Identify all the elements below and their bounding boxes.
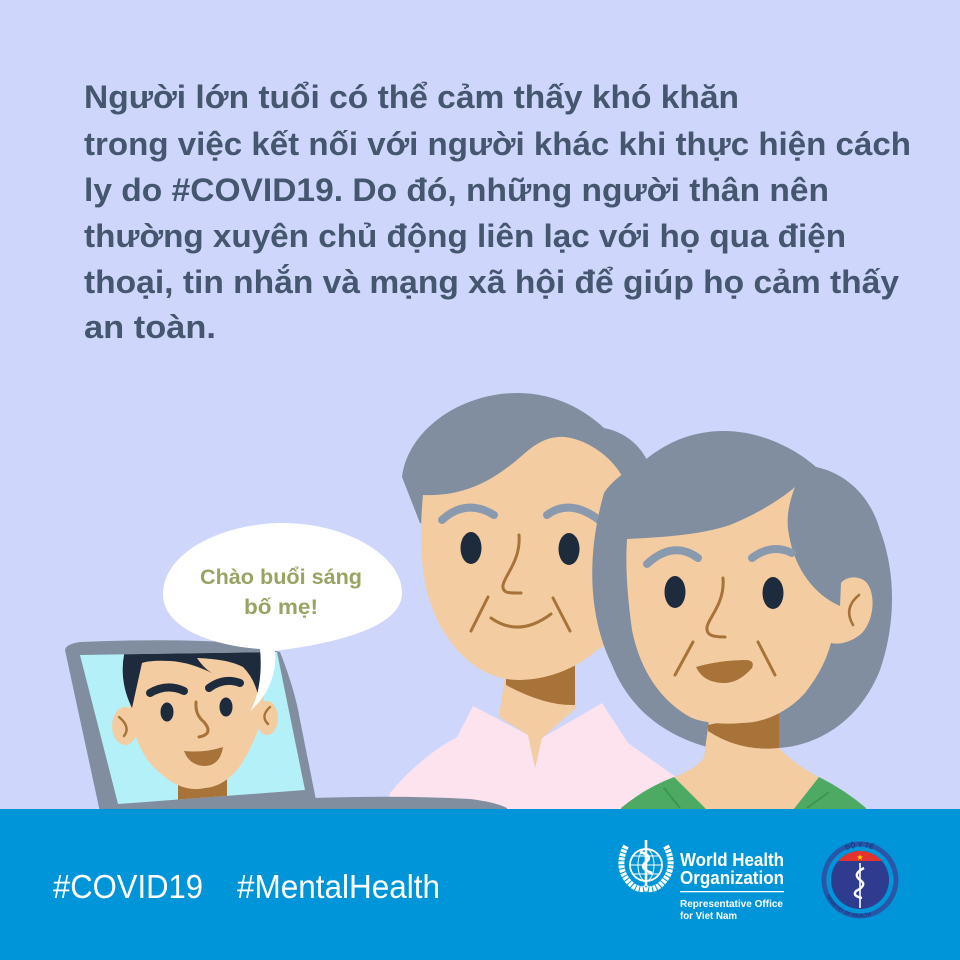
WHO office text [680, 899, 783, 922]
WHO wordmark [680, 850, 784, 888]
laptop base [121, 796, 507, 809]
woman face [626, 487, 873, 724]
star: ★ [856, 853, 864, 862]
heading paragraph: an toàn. [84, 309, 216, 345]
red band [830, 851, 890, 861]
laptop [65, 640, 507, 815]
laptop frame [65, 640, 316, 812]
logo: World Health Organization [621, 840, 784, 922]
man neck [499, 660, 576, 768]
heading paragraph [84, 79, 911, 345]
woman eyes [664, 576, 784, 609]
boy ears [112, 701, 278, 745]
boy nose [196, 702, 208, 737]
boy eyes [160, 698, 232, 722]
woman ear detail [849, 595, 859, 625]
woman shirt [621, 777, 866, 809]
bubble text: bố mẹ! [244, 596, 318, 619]
logo: Ministry of Health: MINISTRY OF HEALTH [826, 894, 871, 917]
man nose and smile lines [471, 535, 570, 631]
man hair [402, 393, 646, 524]
hashtags: #COVID19 [53, 868, 203, 905]
man eyebrows [442, 508, 599, 520]
WHO office text: for Viet Nam [680, 911, 737, 922]
woman mouth [696, 660, 753, 683]
bubble text [200, 566, 362, 619]
ministry name: BỘ Y TẾ [844, 842, 874, 850]
bubble text: Chào buổi sáng [200, 566, 362, 589]
woman neck shadow [708, 710, 779, 749]
boy on screen [112, 652, 278, 800]
boy eyebrows [150, 681, 240, 693]
WHO office text: Representative Office [680, 899, 783, 910]
woman shirt seams [664, 788, 829, 808]
WHO wordmark: Organization [680, 868, 784, 888]
man eyes [460, 532, 580, 565]
logo: Ministry of Health [822, 842, 898, 918]
boy ear details [119, 707, 270, 736]
speech bubble [163, 523, 402, 711]
man face [421, 437, 624, 680]
heading paragraph: trong việc kết nối với người khác khi thực hiện cách [84, 126, 911, 162]
woman nose and wrinkles [675, 578, 775, 675]
laptop screen [80, 652, 305, 804]
WHO emblem [621, 840, 671, 889]
heading paragraph: thường xuyên chủ động liên lạc với họ qua điện [84, 218, 846, 254]
woman hair [592, 431, 892, 748]
boy hair [123, 650, 262, 708]
staff and serpent [859, 863, 861, 908]
boy neck [178, 779, 227, 800]
heading paragraph: ly do #COVID19. Do đó, những người thân nên [84, 172, 829, 208]
boy face [128, 650, 264, 789]
woman eyebrows [647, 549, 792, 564]
man neck shadow [506, 665, 575, 705]
illustration: elderly couple [65, 393, 892, 815]
man figure [385, 393, 690, 815]
man shirt [389, 703, 675, 809]
woman neck [674, 722, 819, 809]
heading paragraph: Người lớn tuổi có thể cảm thấy khó khăn [84, 79, 739, 115]
hashtags [53, 868, 440, 905]
woman figure [592, 431, 892, 815]
boy mouth [184, 747, 223, 766]
hashtags: #MentalHealth [237, 868, 440, 905]
bubble shape [163, 523, 402, 711]
WHO wordmark: World Health [680, 850, 784, 870]
footer bar [0, 809, 960, 960]
heading paragraph: thoại, tin nhắn và mạng xã hội để giúp họ cảm thấy [84, 264, 899, 300]
